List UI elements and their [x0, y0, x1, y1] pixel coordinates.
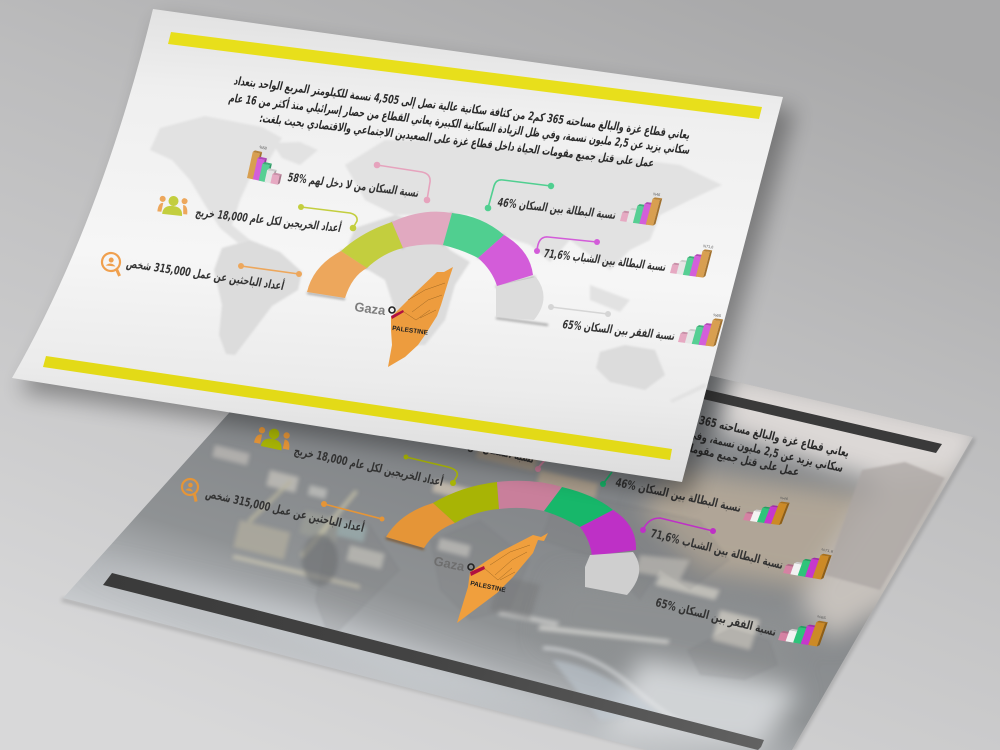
labels: نسبة البطالة بين السكان %46 [496, 195, 618, 223]
back labels: نسبة البطالة بين السكان %46 [614, 475, 743, 516]
map of Palestine: Gaza [354, 299, 387, 318]
bar chart descending: %58 [259, 144, 267, 151]
back labels: أعداد الخريجين لكل عام 18,000 خريج [292, 443, 445, 490]
back map of Palestine [432, 533, 548, 623]
bar chart green label [620, 189, 663, 226]
back icon: people [254, 425, 293, 452]
back gauge segment gray [585, 552, 639, 595]
back icon: search [179, 478, 200, 502]
labels: نسبة البطالة بين الشباب %71,6 [542, 246, 668, 275]
front sheet shadow [20, 20, 795, 498]
back gauge segment magenta [580, 510, 636, 556]
back bar chart green label [743, 493, 792, 525]
back sheet photo background [65, 376, 972, 750]
back bar chart green label: %46 [779, 496, 789, 501]
gauge segment gray [496, 277, 544, 320]
back labels: نسبة السكان من لا دخل لهم %58 [398, 423, 536, 467]
back map of Palestine: Gaza [432, 553, 467, 574]
intro paragraph: عمل على قتل جميع مقومات الحياة داخل قطاع غزة على الصعيدين الاجتماعي والاقتصادي بحيث بلغت: [258, 111, 656, 171]
top yellow bar [168, 32, 762, 119]
intro paragraph: يعاني قطاع غزة والبالغ مساحته 365 كم2 من كثافة سكانية عالية تصل إلى 4,505 نسمة للكيلومتر المربع الواحد بتعداد [232, 74, 692, 143]
back gauge segment pink [497, 481, 562, 511]
back bar chart gray label [778, 609, 830, 647]
back paragraph text: يعاني قطاع غزة والبالغ مساحته 365 كم2 من كثافة سكانية عالية تصل إلى 4,505 نسمة للكيلومتر المربع الواحد بتعداد [369, 340, 851, 461]
back bar chart gray label: %65 [816, 614, 827, 620]
bar chart magenta label [670, 241, 714, 278]
callout lines [238, 162, 611, 317]
back semicircle gauge [386, 481, 639, 595]
labels: نسبة الفقر بين السكان %65 [561, 317, 677, 344]
back bottom dark bar [103, 573, 764, 750]
icon: search [101, 252, 122, 276]
back labels: نسبة البطالة بين الشباب %71,6 [649, 526, 785, 573]
back map of Palestine: PALESTINE [470, 580, 507, 594]
bar chart magenta label: %71,6 [702, 244, 714, 250]
gauge segment orange [307, 251, 367, 298]
bar chart gray label [678, 309, 725, 347]
back callout lines [321, 454, 716, 534]
gauge segment pink [392, 212, 452, 248]
labels: نسبة السكان من لا دخل لهم %58 [286, 170, 421, 201]
back gauge segment orange [386, 503, 455, 548]
back sheet world map silhouette [316, 512, 756, 679]
back labels: نسبة الفقر بين السكان %65 [654, 595, 778, 640]
back bar chart magenta label: %71,6 [821, 547, 835, 554]
gauge segment green [443, 213, 504, 258]
back gauge segment green [544, 487, 613, 527]
gauge segment lime [341, 222, 403, 268]
back labels [204, 423, 785, 640]
front poster sheet [12, 9, 783, 482]
labels [125, 170, 677, 344]
gauge segment magenta [478, 235, 533, 286]
sheet surface [12, 9, 783, 482]
bar chart green label: %46 [652, 192, 661, 197]
back labels: أعداد الباحثين عن عمل 315,000 شخص [204, 486, 366, 536]
labels: أعداد الخريجين لكل عام 18,000 خريج [194, 204, 343, 236]
map of Palestine: PALESTINE [392, 325, 429, 337]
map of Palestine [354, 267, 453, 367]
back paragraph text: عمل على قتل جميع مقومات الحياة داخل قطاع غزة على الصعيدين الاجتماعي والاقتصادي بحيث بلغت: [383, 373, 801, 480]
back paragraph text: سكاني يزيد عن 2,5 مليون نسمة، وفي ظل الزيادة السكانية الكبيرة يعاني القطاع من حصار إسرائيلي منذ أكثر من 16 عام [358, 353, 845, 476]
bar chart gray label: %65 [713, 312, 723, 318]
intro paragraph: سكاني يزيد عن 2,5 مليون نسمة، وفي ظل الزيادة السكانية الكبيرة يعاني القطاع من حصار إسرائيلي منذ أكثر من 16 عام [227, 90, 692, 158]
world map silhouette [150, 116, 722, 403]
back top dark bar [556, 356, 942, 453]
icon: people [157, 194, 189, 217]
bar chart descending [247, 143, 287, 185]
back bar chart magenta label [783, 542, 835, 580]
back poster sheet [61, 376, 976, 750]
back gauge segment lime [433, 482, 499, 523]
labels: أعداد الباحثين عن عمل 315,000 شخص [125, 255, 286, 294]
semicircle gauge [307, 212, 548, 325]
intro paragraph [227, 74, 692, 171]
bottom yellow bar [43, 356, 672, 460]
